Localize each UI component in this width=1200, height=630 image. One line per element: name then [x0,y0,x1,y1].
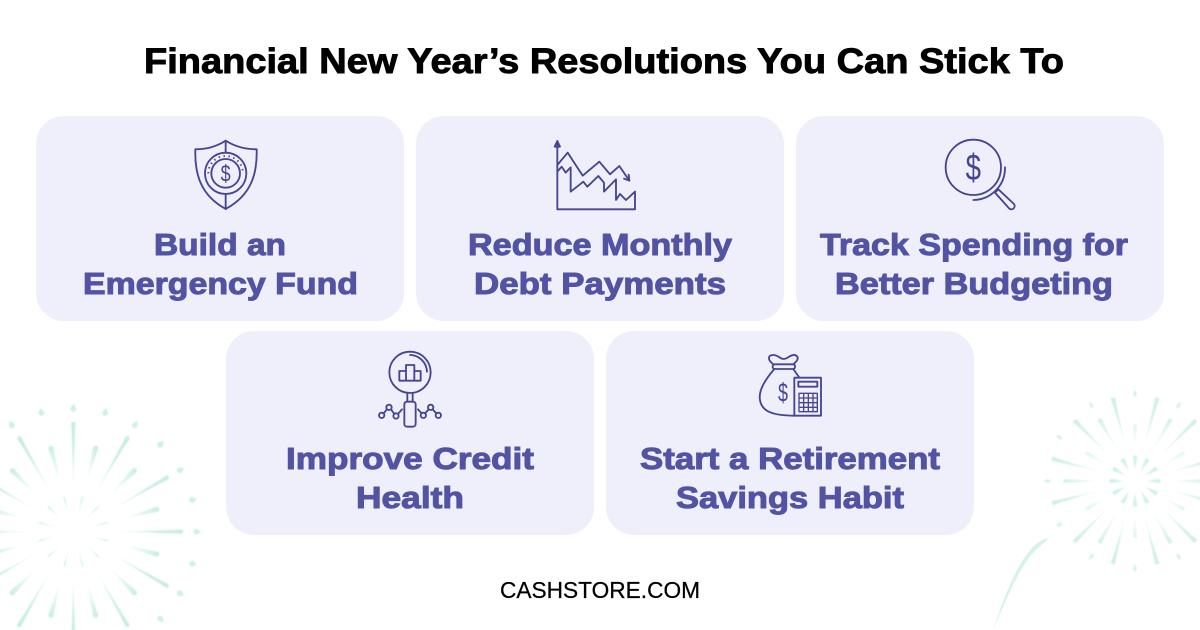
icon: shield with dollar coin: $ [221,160,231,186]
icon: magnifier with bar chart [379,352,441,427]
heading: savings habit: Savings Habit [676,480,904,515]
icon: magnifier with dollar [946,140,1015,209]
panel: improve credit health [226,331,594,535]
title: Financial New Year’s Resolutions You Can Stick To [144,41,1064,81]
heading: reduce monthly: Reduce Monthly [468,227,733,262]
heading: emergency fund: Emergency Fund [83,266,358,301]
heading: health: Health [356,480,464,515]
icon: magnifier with dollar: $ [966,146,981,188]
heading: improve credit: Improve Credit [286,441,534,476]
firework: right [1044,390,1200,572]
footer: brand: CASHSTORE.COM [500,577,700,603]
heading: track spending for: Track Spending for [820,227,1128,262]
icon: shield with dollar coin [195,141,257,209]
heading: build an: Build an [154,227,286,262]
heading: better budgeting: Better Budgeting [835,266,1113,301]
heading: debt payments: Debt Payments [474,266,726,301]
panel: reduce monthly debt payments [416,116,784,321]
firework streak: right [993,538,1048,630]
firework: left [0,404,201,630]
icon: money bag with calculator: $ [778,377,788,407]
icon: falling line chart [555,141,635,209]
icon: money bag with calculator [760,355,821,416]
panel: start a retirement savings habit [606,331,974,535]
panel: build an emergency fund [36,116,404,321]
panel: track spending for better budgeting [796,116,1164,321]
heading: start a retirement: Start a Retirement [640,441,940,476]
